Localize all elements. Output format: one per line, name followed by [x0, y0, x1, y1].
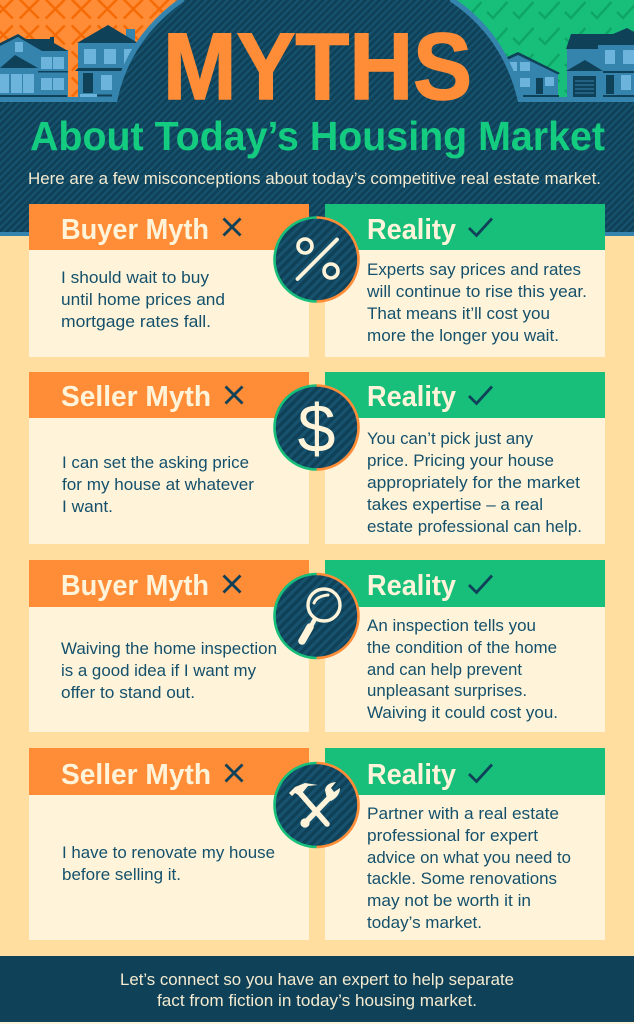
myth text: I should wait to buy	[61, 268, 210, 287]
reality text: professional for expert	[367, 826, 538, 845]
intro text: Here are a few misconceptions about today’s competitive real estate market.	[28, 169, 601, 188]
reality text: advice on what you need to	[367, 848, 571, 867]
myth text: I have to renovate my house	[62, 843, 275, 862]
icon: small house right	[505, 52, 560, 97]
reality text: Partner with a real estate	[367, 804, 559, 823]
heading: Reality	[367, 381, 456, 413]
reality text: and can help prevent	[367, 660, 522, 679]
panel: row 2 myth	[29, 372, 309, 544]
panel: row 4 myth	[29, 748, 309, 940]
reality text: Waiving it could cost you.	[367, 703, 558, 722]
icon: check	[469, 576, 492, 592]
heading: Reality	[367, 759, 456, 791]
title: MYTHS: MYTHS	[163, 14, 472, 120]
panel: row 1 myth	[29, 204, 309, 357]
heading: Reality	[367, 214, 456, 246]
icon: tall house left	[75, 25, 140, 97]
reality text: appropriately for the market	[367, 473, 580, 492]
myth text: offer to stand out.	[61, 683, 195, 702]
heading: Buyer Myth	[61, 570, 209, 602]
heading: Seller Myth	[61, 381, 211, 413]
reality text: the condition of the home	[367, 638, 557, 657]
panel: row 3 myth	[29, 560, 309, 732]
reality text	[367, 429, 582, 536]
reality text: estate professional can help.	[367, 517, 582, 536]
myth text	[61, 268, 225, 331]
icon: check	[469, 218, 492, 236]
reality text: That means it’ll cost you	[367, 304, 550, 323]
reality text	[366, 260, 587, 345]
footer band	[0, 956, 634, 1024]
reality text: tackle. Some renovations	[367, 869, 557, 888]
reality text: You can’t pick just any	[367, 429, 533, 448]
heading: Buyer Myth	[61, 214, 209, 246]
icon: large house left	[0, 34, 68, 97]
icon: x	[226, 386, 242, 404]
myth text: for my house at whatever	[62, 475, 254, 494]
icon: x	[224, 218, 240, 236]
panel: green check pattern with houses	[451, 0, 634, 101]
reality text	[367, 804, 571, 932]
icon: x	[224, 576, 240, 592]
icon: check	[469, 386, 492, 404]
myth text: before selling it.	[62, 865, 181, 884]
icon: x	[226, 764, 242, 782]
myth text: I want.	[62, 497, 113, 516]
reality text: Experts say prices and rates	[367, 260, 581, 279]
panel: row 3 reality	[325, 560, 605, 732]
reality text: takes expertise – a real	[367, 495, 543, 514]
heading: Reality	[367, 570, 456, 602]
panel: row 2 reality	[325, 372, 605, 544]
myth text: until home prices and	[61, 290, 225, 309]
heading: Seller Myth	[61, 759, 211, 791]
subtitle: About Today’s Housing Market	[30, 113, 605, 159]
icon: dollar badge: $	[298, 391, 335, 467]
icon: check	[469, 764, 492, 782]
reality text: today’s market.	[367, 913, 482, 932]
myth text: is a good idea if I want my	[61, 661, 256, 680]
header banner	[0, 0, 634, 236]
myth text: I can set the asking price	[62, 453, 249, 472]
myth text	[61, 639, 277, 702]
footer text	[120, 971, 514, 1010]
footer text: Let’s connect so you have an expert to help separate	[120, 971, 514, 989]
panel: orange x pattern with houses	[0, 0, 183, 101]
myth text: mortgage rates fall.	[61, 312, 211, 331]
reality text: will continue to rise this year.	[366, 282, 587, 301]
icon: magnifier badge	[274, 574, 359, 658]
icon: garage house right	[566, 28, 634, 97]
myth text	[62, 843, 275, 884]
panel: row 1 reality	[325, 204, 605, 357]
icon: percent badge	[274, 218, 359, 302]
myth text: Waiving the home inspection	[61, 639, 277, 658]
reality text: unpleasant surprises.	[367, 681, 527, 700]
myth text	[62, 453, 254, 516]
reality text	[367, 616, 558, 722]
panel: row 4 reality	[325, 748, 605, 940]
icon: dollar badge	[274, 386, 359, 470]
icon: tools badge	[274, 763, 359, 847]
reality text: An inspection tells you	[367, 616, 536, 635]
reality text: price. Pricing your house	[367, 451, 554, 470]
footer text: fact from fiction in today’s housing market.	[157, 992, 477, 1010]
reality text: more the longer you wait.	[367, 326, 559, 345]
reality text: may not be worth it in	[367, 891, 531, 910]
